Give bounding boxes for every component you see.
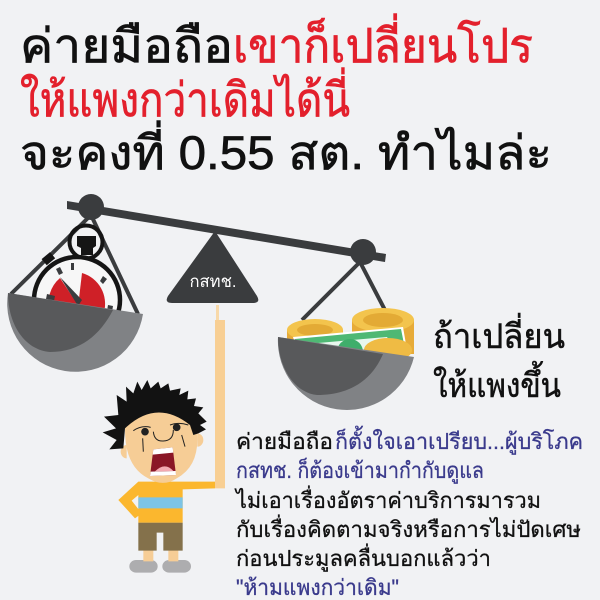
explanatory text: ไม่เอาเรื่องอัตราค่าบริการมารวม [234, 485, 541, 513]
title: จะคงที่ 0.55 สต. ทำไมล่ะ [20, 120, 552, 179]
title: เขาก็เปลี่ยนโปร [233, 13, 533, 72]
shirt stripe [138, 497, 183, 508]
pole top [216, 305, 219, 320]
title: ให้แพงกว่าเดิมได้นี่ [20, 67, 350, 126]
ears [121, 433, 203, 458]
spiky hair [103, 380, 207, 449]
fulcrum: กสทช.: กสทช. [190, 272, 236, 291]
text: if the price rises: ถ้าเปลี่ยน [433, 313, 565, 356]
raised arm [215, 320, 225, 488]
face [125, 412, 197, 483]
explanatory text [234, 426, 583, 600]
text: if the price rises [433, 313, 565, 405]
explanatory text: "ห้ามแพงกว่าเดิม" [236, 575, 399, 600]
explanatory text: กสทช. ก็ต้องเข้ามากำกับดูแล [236, 456, 484, 484]
explanatory text: ค่ายมือถือ [236, 429, 333, 454]
shorts [138, 523, 183, 551]
mouth [150, 447, 176, 476]
title [20, 13, 552, 179]
legs [143, 550, 178, 561]
explanatory text: ก่อนประมูลคลื่นบอกแล้วว่า [236, 543, 491, 572]
icon: gold coins and banknote [287, 308, 414, 365]
title: ค่ายมือถือ [20, 19, 233, 72]
shoes [129, 560, 191, 573]
left pan with stopwatch [7, 215, 143, 372]
fulcrum: กสทช. [167, 231, 258, 303]
text: if the price rises: ให้แพงขึ้น [433, 361, 561, 405]
eyes and brows [133, 423, 188, 452]
explanatory text: ก็ตั้งใจเอาเปรียบ...ผู้บริโภค [335, 426, 583, 455]
explanatory text: กับเรื่องคิดตามจริงหรือการไม่ปัดเศษ [236, 514, 581, 542]
shirt [118, 482, 215, 523]
scale beam [67, 194, 386, 265]
right pan with money [278, 262, 414, 410]
character: shouting boy [103, 320, 225, 573]
icon: stopwatch [34, 226, 120, 343]
